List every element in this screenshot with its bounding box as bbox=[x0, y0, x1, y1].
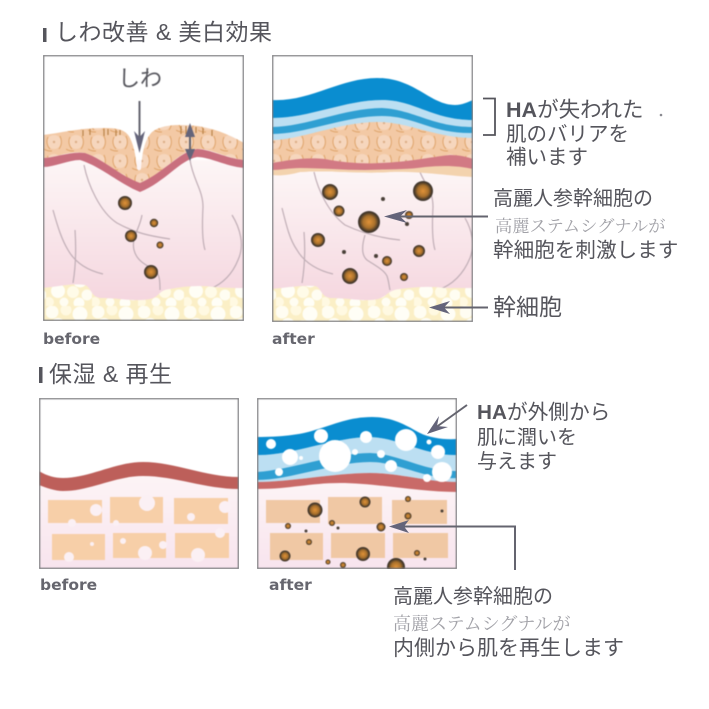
heading: wrinkle and whitening: しわ改善 & 美白効果 bbox=[55, 19, 272, 45]
dermis bbox=[44, 160, 243, 300]
label: before: before bbox=[43, 330, 100, 348]
water bubbles bbox=[266, 429, 452, 482]
panel: moisture after bbox=[257, 398, 457, 576]
cells bbox=[48, 497, 229, 560]
epidermis bbox=[43, 125, 244, 184]
dermis bbox=[273, 172, 472, 300]
callout: HA barrier bbox=[506, 98, 644, 169]
panel: moisture before bbox=[39, 398, 239, 569]
arrow: to fat layer bbox=[429, 301, 488, 314]
panel: wrinkle after bbox=[272, 55, 473, 322]
callout: stem cell: 幹細胞 bbox=[493, 294, 562, 320]
callout: regeneration: 高麗人参幹細胞の bbox=[393, 585, 553, 608]
arrow: to cell layer bbox=[389, 520, 515, 570]
callout: regeneration: 高麗ステムシグナルが bbox=[393, 614, 570, 634]
dermis bbox=[39, 476, 239, 569]
arrow: to stem cell bbox=[384, 210, 488, 223]
callout: stem signal: 高麗人参幹細胞の bbox=[493, 187, 653, 210]
callout: HA outside: 与えます bbox=[477, 450, 557, 473]
callout: HA barrier: 補います bbox=[506, 146, 588, 169]
stem cells bbox=[311, 181, 433, 284]
skin band bbox=[39, 462, 239, 491]
HA layers bbox=[257, 417, 457, 482]
callout: regeneration bbox=[393, 585, 624, 660]
callout: HA outside: 肌に潤いを bbox=[477, 426, 577, 449]
epidermis bbox=[272, 121, 472, 164]
fat layer bbox=[43, 284, 244, 321]
nerve lines bbox=[53, 160, 241, 290]
callout: stem signal: 幹細胞を刺激します bbox=[493, 239, 678, 262]
dermis bbox=[257, 482, 457, 569]
callout: HA barrier: 肌のバリアを bbox=[506, 123, 629, 146]
label: before: before bbox=[40, 576, 97, 594]
heading: moisture and regeneration: 保湿 & 再生 bbox=[49, 361, 172, 387]
cell holes bbox=[64, 495, 231, 562]
bracket bbox=[483, 98, 495, 135]
cells bbox=[266, 497, 448, 560]
basal band bbox=[43, 149, 244, 192]
speck bbox=[660, 114, 662, 116]
callout: stem signal: 高麗ステムシグナルが bbox=[495, 217, 665, 236]
stem cells bbox=[280, 496, 444, 576]
arrow: to HA layer bbox=[427, 405, 467, 434]
surface ticks bbox=[83, 126, 212, 136]
callout: stem signal bbox=[493, 187, 678, 262]
callout: regeneration: 内側から肌を再生します bbox=[393, 637, 624, 660]
label: after: after bbox=[272, 330, 315, 348]
HA layers bbox=[272, 78, 473, 140]
skin band bbox=[257, 473, 457, 492]
beige base bbox=[274, 166, 472, 178]
thickness arrow bbox=[185, 123, 195, 161]
callout: HA outside bbox=[477, 401, 610, 473]
panel: wrinkle before bbox=[43, 55, 244, 321]
fat layer bbox=[272, 286, 473, 322]
wrinkle label: しわ bbox=[118, 66, 162, 91]
basal band bbox=[272, 155, 473, 170]
wrinkle arrow bbox=[134, 101, 145, 153]
label: after: after bbox=[269, 576, 312, 594]
callout: HA barrier: HAが失われた bbox=[506, 98, 644, 122]
nerve lines bbox=[282, 172, 472, 290]
stem cells bbox=[118, 196, 164, 279]
callout: HA outside: HAが外側から bbox=[477, 401, 610, 424]
